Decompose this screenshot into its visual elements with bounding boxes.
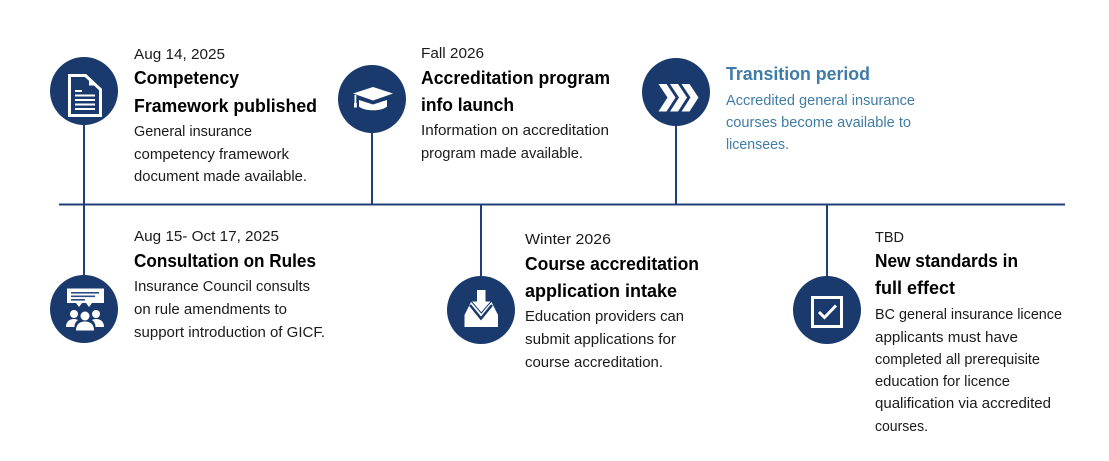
text: consultation on rules milestone: Insurance Council consults xyxy=(134,278,310,295)
text: new standards milestone: qualification via accredited xyxy=(875,395,1051,412)
icon: checkbox xyxy=(793,276,861,344)
text: competency framework milestone: General insurance xyxy=(134,123,252,140)
text: transition period: courses become available to xyxy=(726,114,911,131)
text: new standards milestone xyxy=(875,229,1062,435)
text: accreditation program milestone: Fall 2026 xyxy=(421,45,484,62)
text: transition period: licensees. xyxy=(726,136,789,153)
text: course accreditation milestone: application intake xyxy=(525,281,677,301)
text: new standards milestone: education for licence xyxy=(875,373,1010,390)
text: new standards milestone: applicants must have xyxy=(875,329,1018,346)
text: consultation on rules milestone xyxy=(134,228,325,341)
text: consultation on rules milestone: on rule amendments to xyxy=(134,301,287,318)
icon: inbox download xyxy=(447,276,515,344)
text: transition period xyxy=(726,64,915,153)
text: competency framework milestone: Competency xyxy=(134,68,239,88)
text: course accreditation milestone: Education providers can xyxy=(525,308,684,325)
timeline axis xyxy=(59,120,1065,281)
text: competency framework milestone: Aug 14, 2025 xyxy=(134,46,225,63)
text: course accreditation milestone: Course accreditation xyxy=(525,254,699,274)
text: accreditation program milestone: Information on accreditation xyxy=(421,122,609,139)
text: accreditation program milestone: program made available. xyxy=(421,145,583,162)
icon: graduation cap xyxy=(338,65,406,133)
text: course accreditation milestone: submit applications for xyxy=(525,331,676,348)
text: new standards milestone: completed all prerequisite xyxy=(875,351,1040,368)
text: new standards milestone: New standards in xyxy=(875,251,1018,271)
text: consultation on rules milestone: Aug 15- Oct 17, 2025 xyxy=(134,228,279,245)
text: accreditation program milestone: Accreditation program xyxy=(421,68,610,88)
text: competency framework milestone: document made available. xyxy=(134,168,307,185)
text: new standards milestone: BC general insurance licence xyxy=(875,306,1062,323)
text: accreditation program milestone: info launch xyxy=(421,95,514,115)
icon: document xyxy=(50,57,118,125)
text: competency framework milestone: competency framework xyxy=(134,146,289,163)
text: accreditation program milestone xyxy=(421,45,610,162)
icon: consultation group xyxy=(50,275,118,343)
text: consultation on rules milestone: Consultation on Rules xyxy=(134,251,316,271)
text: new standards milestone: full effect xyxy=(875,278,955,298)
text: new standards milestone: courses. xyxy=(875,418,928,435)
text: consultation on rules milestone: support introduction of GICF. xyxy=(134,324,325,341)
text: course accreditation milestone xyxy=(525,231,699,371)
icon: chevrons xyxy=(642,58,710,126)
text: transition period: Accredited general insurance xyxy=(726,92,915,109)
text: new standards milestone: TBD xyxy=(875,229,904,246)
text: competency framework milestone xyxy=(134,46,317,185)
text: course accreditation milestone: Winter 2026 xyxy=(525,231,611,248)
text: competency framework milestone: Framework published xyxy=(134,96,317,116)
text: transition period: Transition period xyxy=(726,64,870,84)
text: course accreditation milestone: course accreditation. xyxy=(525,354,663,371)
